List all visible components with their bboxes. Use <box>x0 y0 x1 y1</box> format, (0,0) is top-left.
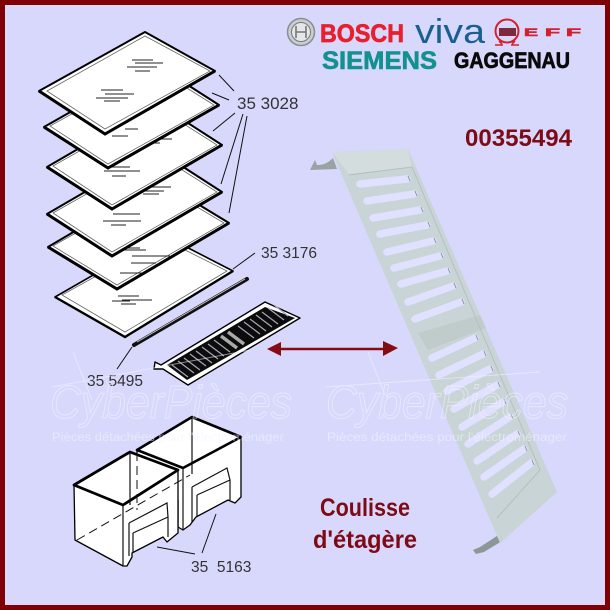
slotted tray <box>154 302 300 385</box>
logo: Neff <box>495 20 582 45</box>
shelf stack diagram <box>39 32 300 385</box>
right bin <box>137 417 241 530</box>
storage bins <box>74 417 251 576</box>
slot shadows <box>408 176 534 465</box>
logo: Viva: viva <box>415 13 485 51</box>
rod label: 35 5495 <box>87 373 143 390</box>
shelf 4 <box>47 150 222 256</box>
bin label <box>157 514 251 576</box>
slide body <box>332 149 557 543</box>
product name: Coulisse <box>320 494 410 522</box>
shelf part label <box>212 75 298 213</box>
watermark: Pièces détachées pour l'électroménager <box>52 432 284 444</box>
shelf part label: 35 3028 <box>237 94 298 113</box>
hooks <box>310 158 502 554</box>
part number: 00355494 <box>465 125 573 152</box>
logo: Neff: F <box>566 27 582 39</box>
watermark: CyberPièces <box>326 376 568 428</box>
logo: Siemens: SIEMENS <box>322 47 437 75</box>
part photo: shelf slide <box>310 149 557 554</box>
product name: d'étagère <box>313 526 417 554</box>
watermark: CyberPièces <box>50 376 292 428</box>
double arrow <box>267 341 398 356</box>
logo: Bosch emblem <box>288 18 314 46</box>
slots <box>360 179 531 494</box>
brand logos <box>288 13 582 75</box>
rod label <box>87 347 143 390</box>
logo: Gaggenau: GAGGENAU <box>454 48 570 73</box>
bin label: 35 5163 <box>191 559 251 576</box>
product name <box>313 494 417 554</box>
glass shelf label <box>233 245 317 269</box>
watermark: Pièces détachées pour l'électroménager <box>327 432 567 444</box>
shelf 6 <box>55 235 233 337</box>
watermark <box>50 350 568 444</box>
shelf 1 <box>39 32 215 134</box>
logo: Neff: E <box>524 27 538 39</box>
glass shelf label: 35 3176 <box>261 245 317 262</box>
logo: Neff: F <box>545 27 561 39</box>
logo: Bosch: BOSCH <box>320 20 404 48</box>
left bin <box>74 452 190 566</box>
shelf 2 <box>44 64 219 168</box>
shelf 5 <box>48 181 229 289</box>
rod <box>134 279 247 345</box>
shelf 3 <box>47 103 222 209</box>
